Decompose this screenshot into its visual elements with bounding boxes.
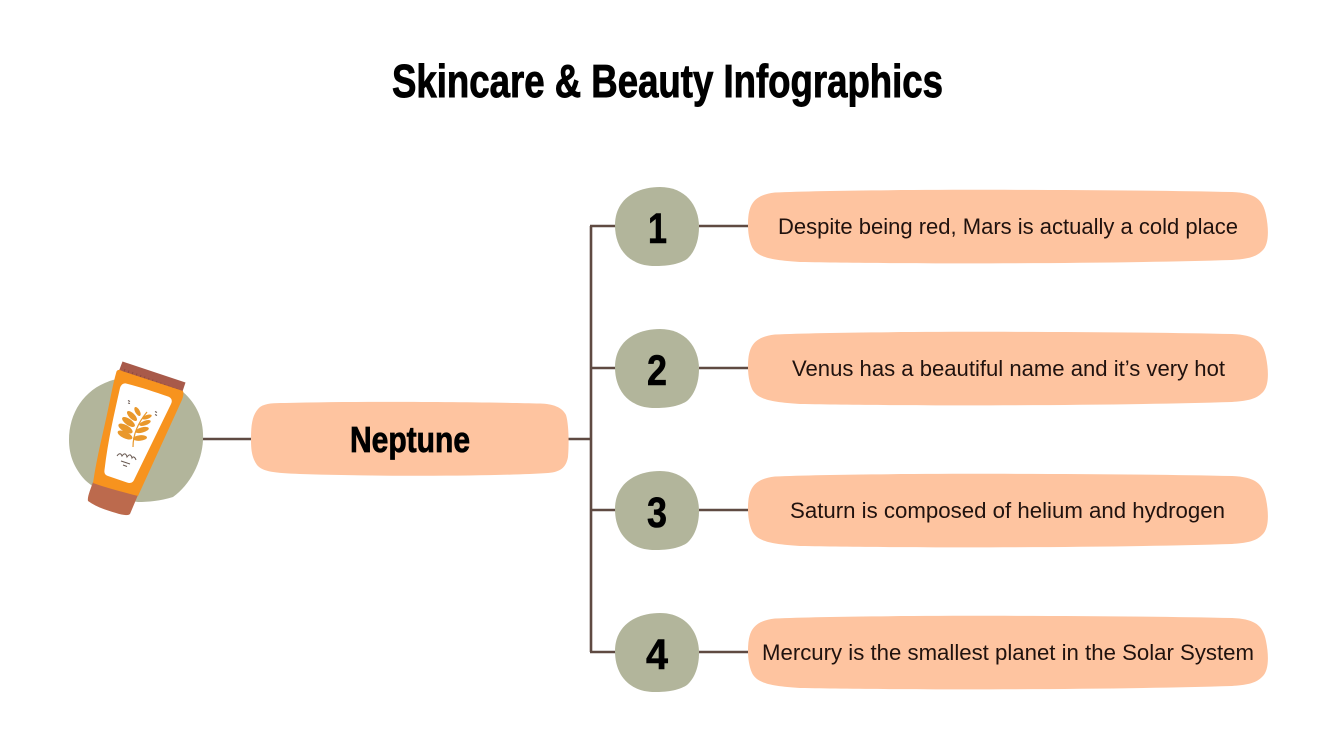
tube label: [104, 383, 172, 483]
connector lines: [203, 226, 748, 652]
item 4 text pill: Mercury is the smallest planet in the Solar System: [762, 640, 1254, 665]
number badge 4: [615, 613, 699, 692]
central label: Neptune: [251, 402, 569, 476]
tube body: [93, 370, 183, 496]
item 3 text pill: [748, 474, 1268, 547]
title: Skincare & Beauty Infographics: [392, 55, 943, 107]
item 3 text pill: Saturn is composed of helium and hydrogen: [790, 498, 1225, 523]
item 1: [615, 187, 1268, 266]
item 2: [615, 329, 1268, 408]
icon: skincare tube: [69, 362, 203, 515]
number badge 1: 1: [648, 205, 667, 253]
leaf motif: [116, 406, 152, 447]
number badge 2: 2: [647, 347, 667, 395]
icon backdrop blob: [69, 376, 203, 502]
item 2 text pill: [748, 332, 1268, 405]
number badge 1: [615, 187, 699, 266]
number badge 3: 3: [647, 489, 667, 537]
number badge 2: [615, 329, 699, 408]
item 4 text pill: [748, 616, 1268, 689]
item 1 text pill: [748, 190, 1268, 263]
tube base: [88, 482, 138, 515]
number badge 4: 4: [646, 631, 668, 679]
item 1 text pill: Despite being red, Mars is actually a cold place: [778, 214, 1238, 239]
label squiggles: [117, 400, 157, 466]
item 3: [615, 471, 1268, 550]
item 4: [615, 613, 1268, 692]
central label: Neptune: Neptune: [350, 419, 470, 460]
tube cap: [118, 362, 186, 393]
number badge 3: [615, 471, 699, 550]
item 2 text pill: Venus has a beautiful name and it’s very hot: [792, 356, 1225, 381]
